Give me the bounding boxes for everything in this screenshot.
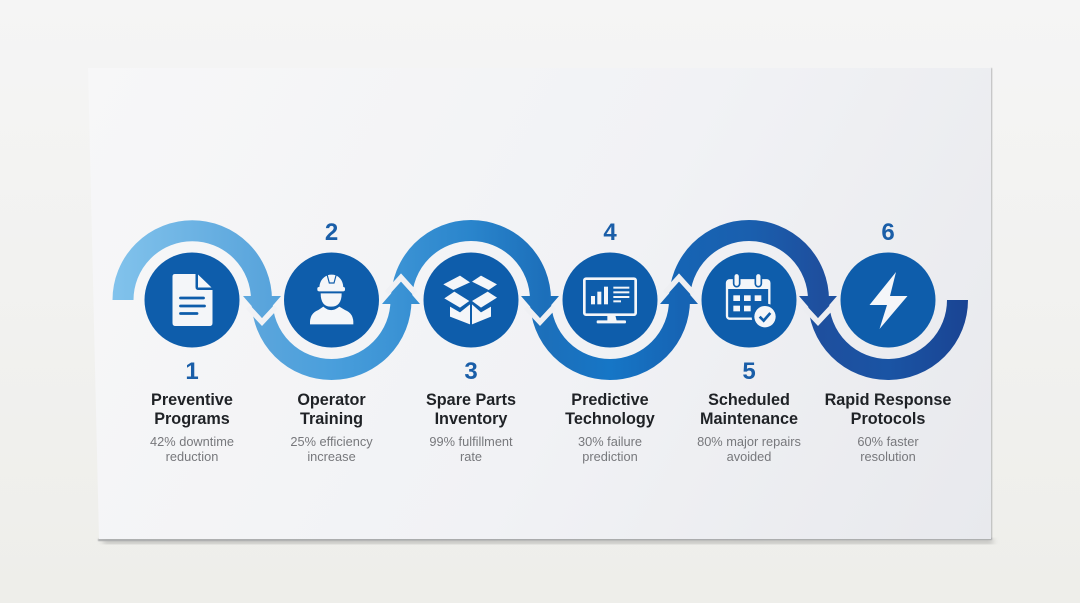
heading 1: Preventive <box>151 391 233 409</box>
heading 5: Maintenance <box>700 410 798 428</box>
heading 2: Operator <box>297 391 366 409</box>
description 1: 42% downtime <box>150 434 234 449</box>
heading 5: Scheduled <box>708 391 790 409</box>
arc 2 <box>262 300 401 370</box>
heading 2: Training <box>300 410 363 428</box>
step 5 label <box>697 358 801 464</box>
description 1: reduction <box>166 449 218 464</box>
arc 4 <box>540 300 680 370</box>
description 3: 99% fulfillment <box>429 434 513 449</box>
arrowhead 1 <box>243 296 281 318</box>
step 3 label <box>426 358 516 464</box>
step 1 circle icon <box>144 252 240 348</box>
arrowhead 3 <box>521 296 559 318</box>
description 5: avoided <box>727 449 771 464</box>
arrowhead 2 <box>382 282 420 304</box>
step 6 circle icon <box>840 252 936 348</box>
arrowhead 4 <box>660 282 698 304</box>
paper panel <box>88 68 991 539</box>
description 3: rate <box>460 449 482 464</box>
number 1: 1 <box>185 358 199 385</box>
arc 3 <box>402 231 540 300</box>
step 4 label <box>565 219 655 464</box>
heading 3: Spare Parts <box>426 391 516 409</box>
description 4: 30% failure <box>578 434 642 449</box>
arc 6 <box>818 300 958 370</box>
step 4 circle icon <box>562 252 658 348</box>
paper shadow <box>102 538 994 544</box>
step 2 label <box>290 219 373 464</box>
number 5: 5 <box>742 358 756 385</box>
number 3: 3 <box>464 358 478 385</box>
icon: document <box>172 274 212 326</box>
step 3 circle icon <box>424 252 518 348</box>
arrowhead 5 <box>799 296 837 318</box>
step 2 circle icon <box>284 252 379 348</box>
number 2: 2 <box>325 219 338 246</box>
flow ribbon <box>123 231 958 370</box>
arc 1 <box>123 231 262 300</box>
number 6: 6 <box>881 219 895 246</box>
icon: open box <box>443 276 497 324</box>
paper edge <box>98 68 992 541</box>
step 5 circle icon <box>702 252 796 348</box>
step 6 label <box>825 219 951 464</box>
heading 3: Inventory <box>435 410 507 428</box>
heading 4: Technology <box>565 410 655 428</box>
description 2: increase <box>307 449 356 464</box>
description 4: prediction <box>582 449 638 464</box>
heading 6: Rapid Response <box>825 391 951 409</box>
icon: monitor with chart <box>584 279 636 323</box>
heading 6: Protocols <box>851 410 925 428</box>
icon: worker with hard hat <box>310 274 353 324</box>
arc 5 <box>680 231 818 300</box>
heading 1: Programs <box>154 410 230 428</box>
description 2: 25% efficiency <box>290 434 373 449</box>
description 6: resolution <box>860 449 916 464</box>
description 6: 60% faster <box>857 434 919 449</box>
heading 4: Predictive <box>571 391 649 409</box>
number 4: 4 <box>603 219 617 246</box>
step 1 label <box>150 358 234 464</box>
description 5: 80% major repairs <box>697 434 801 449</box>
icon: lightning bolt <box>870 272 908 329</box>
icon: calendar with check <box>727 273 778 330</box>
